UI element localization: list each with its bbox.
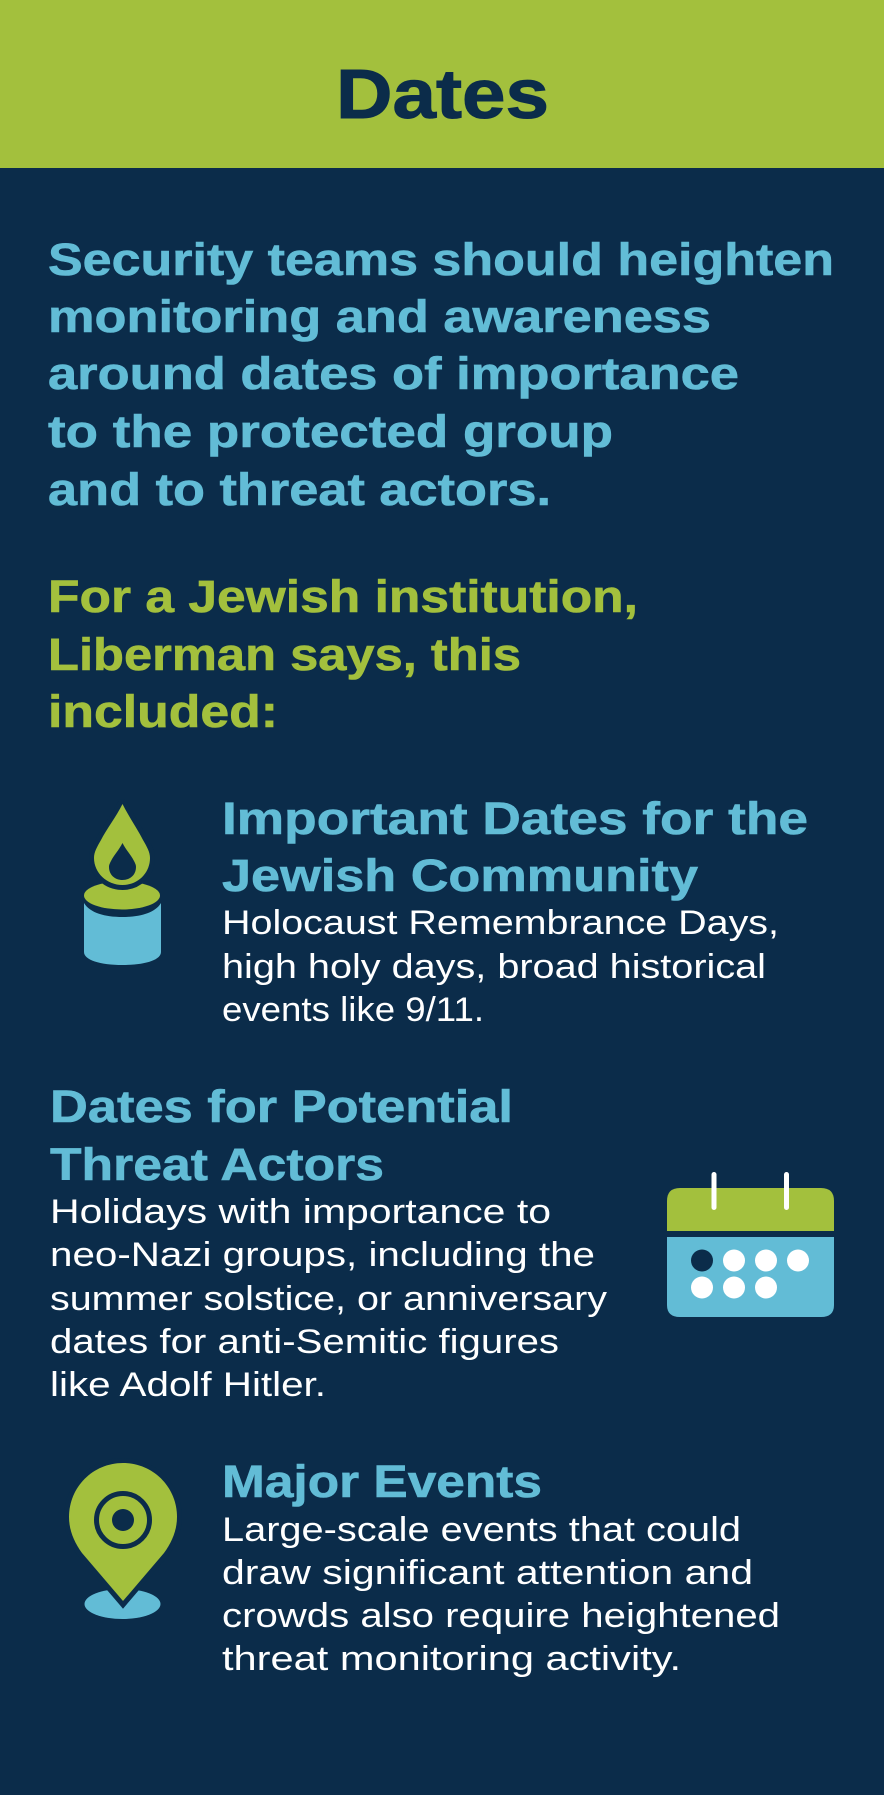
body: threat actor dates: [50, 1193, 607, 1404]
green subheading: included:: [48, 686, 278, 737]
body: important dates: high holy days, broad historical: [222, 948, 766, 986]
body: threat actor dates: neo-Nazi groups, including the: [50, 1236, 595, 1274]
intro statement: monitoring and awareness: [48, 291, 711, 342]
body: important dates: events like 9/11.: [222, 991, 484, 1029]
section: important dates: [222, 793, 808, 1029]
body: threat actor dates: dates for anti-Semitic figures: [50, 1323, 559, 1361]
icon: map pin: [69, 1463, 177, 1619]
body: major events: draw significant attention and: [222, 1554, 753, 1592]
body: threat actor dates: like Adolf Hitler.: [50, 1366, 326, 1404]
green subheading: For a Jewish institution,: [48, 571, 638, 622]
heading: major events: Major Events: [222, 1456, 542, 1507]
intro statement: and to threat actors.: [48, 464, 551, 515]
body: important dates: [222, 904, 779, 1029]
heading: important dates: [222, 793, 808, 901]
body: major events: threat monitoring activity.: [222, 1640, 681, 1678]
section: threat actor dates: [50, 1081, 607, 1404]
icon: calendar: [667, 1172, 834, 1317]
body: threat actor dates: summer solstice, or anniversary: [50, 1280, 607, 1318]
heading: threat actor dates: Threat Actors: [50, 1139, 384, 1190]
intro statement: to the protected group: [48, 406, 613, 457]
body: major events: [222, 1511, 780, 1678]
heading: threat actor dates: Dates for Potential: [50, 1081, 513, 1132]
body: threat actor dates: Holidays with importance to: [50, 1193, 551, 1231]
heading: threat actor dates: [50, 1081, 513, 1190]
icon: candle: [84, 804, 161, 965]
heading: important dates: Jewish Community: [222, 850, 698, 901]
body: major events: Large-scale events that could: [222, 1511, 741, 1549]
section: major events: [222, 1456, 780, 1678]
body: important dates: Holocaust Remembrance Days,: [222, 904, 779, 942]
green subheading: [48, 571, 638, 737]
intro statement: Security teams should heighten: [48, 234, 834, 285]
title: Dates: [336, 55, 549, 133]
heading: important dates: Important Dates for the: [222, 793, 808, 844]
green subheading: Liberman says, this: [48, 629, 521, 680]
header banner: [0, 0, 884, 168]
intro statement: [48, 234, 834, 515]
intro statement: around dates of importance: [48, 348, 739, 399]
body: major events: crowds also require heightened: [222, 1597, 780, 1635]
